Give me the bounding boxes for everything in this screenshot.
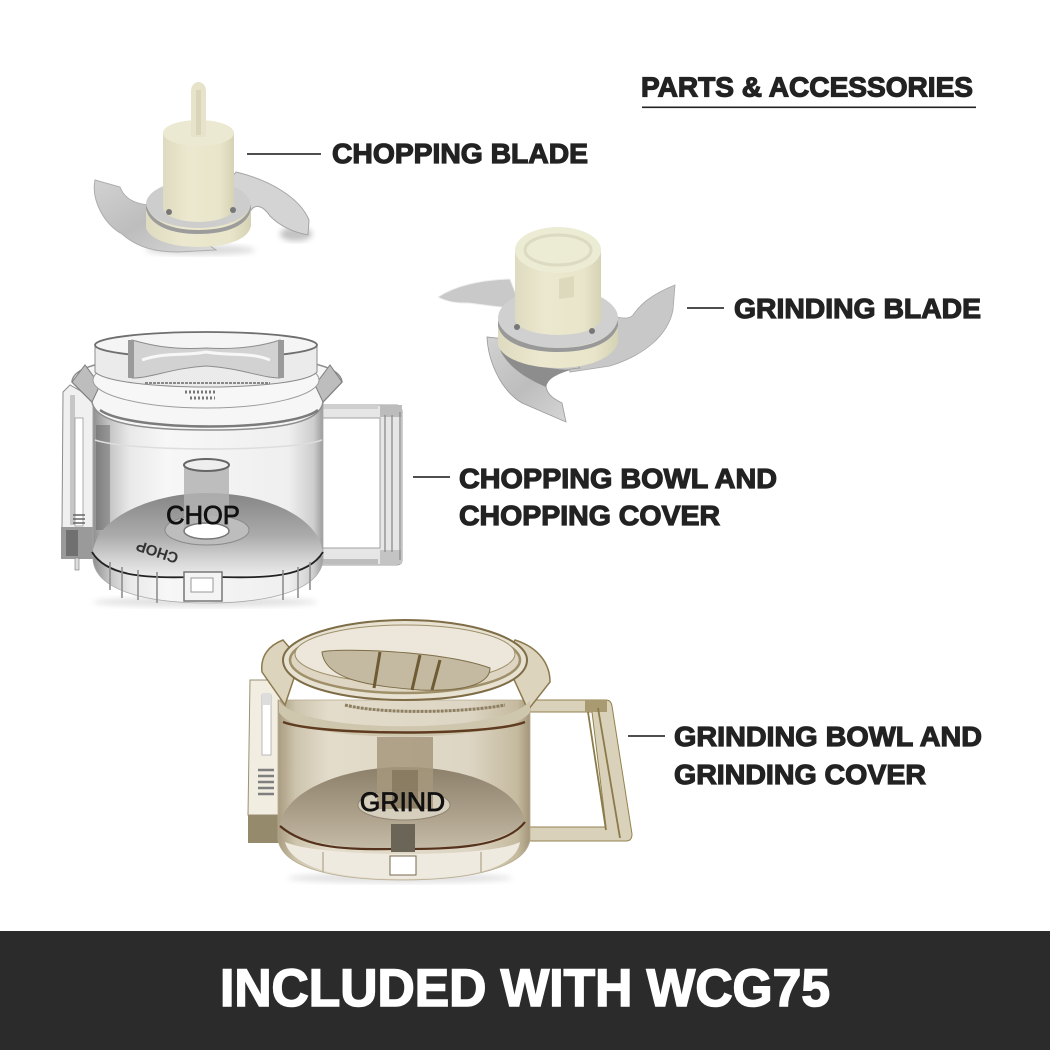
lid	[283, 620, 527, 700]
latch	[248, 680, 283, 815]
bowl wall	[93, 400, 323, 603]
footer banner	[0, 931, 1050, 1050]
label: chopping bowl and cover	[459, 463, 777, 531]
handle	[322, 405, 402, 565]
bowl label: CHOP: CHOP	[166, 502, 240, 530]
label: chopping blade: CHOPPING BLADE	[332, 138, 588, 169]
floor	[93, 493, 323, 578]
label: grinding bowl and cover	[674, 721, 982, 790]
label: chopping bowl and cover: CHOPPING BOWL AND	[459, 463, 777, 494]
lid	[93, 352, 319, 408]
grinding bowl and cover photo	[248, 620, 632, 883]
leader line: chopping blade	[247, 153, 321, 155]
leader line: chopping bowl	[413, 476, 450, 478]
label: grinding bowl and cover: GRINDING BOWL AND	[674, 721, 982, 752]
skirt ribs	[110, 562, 310, 603]
floor	[280, 767, 525, 849]
chopping bowl and cover photo: CHOP	[134, 537, 181, 566]
footer banner: INCLUDED WITH WCG75	[220, 959, 830, 1018]
bowl wall	[278, 700, 530, 880]
bowl label: GRIND: GRIND	[360, 787, 445, 817]
label: grinding bowl and cover: GRINDING COVER	[674, 759, 926, 790]
grinding blade photo	[438, 227, 675, 422]
handle	[528, 700, 632, 841]
chopping bowl and cover photo	[61, 332, 402, 607]
hub	[184, 465, 229, 531]
rim ears	[262, 640, 550, 710]
lower rim band	[279, 700, 530, 737]
heading: parts and accessories: PARTS & ACCESSORIES	[641, 72, 973, 102]
hub	[377, 737, 433, 809]
chopping blade photo	[94, 82, 312, 255]
leader line: grinding bowl	[628, 735, 665, 737]
label: chopping bowl and cover: CHOPPING COVER	[459, 500, 720, 531]
label: grinding blade: GRINDING BLADE	[734, 293, 981, 324]
latch	[62, 385, 93, 528]
leader line: grinding blade	[687, 307, 724, 309]
lower rim	[72, 357, 342, 430]
